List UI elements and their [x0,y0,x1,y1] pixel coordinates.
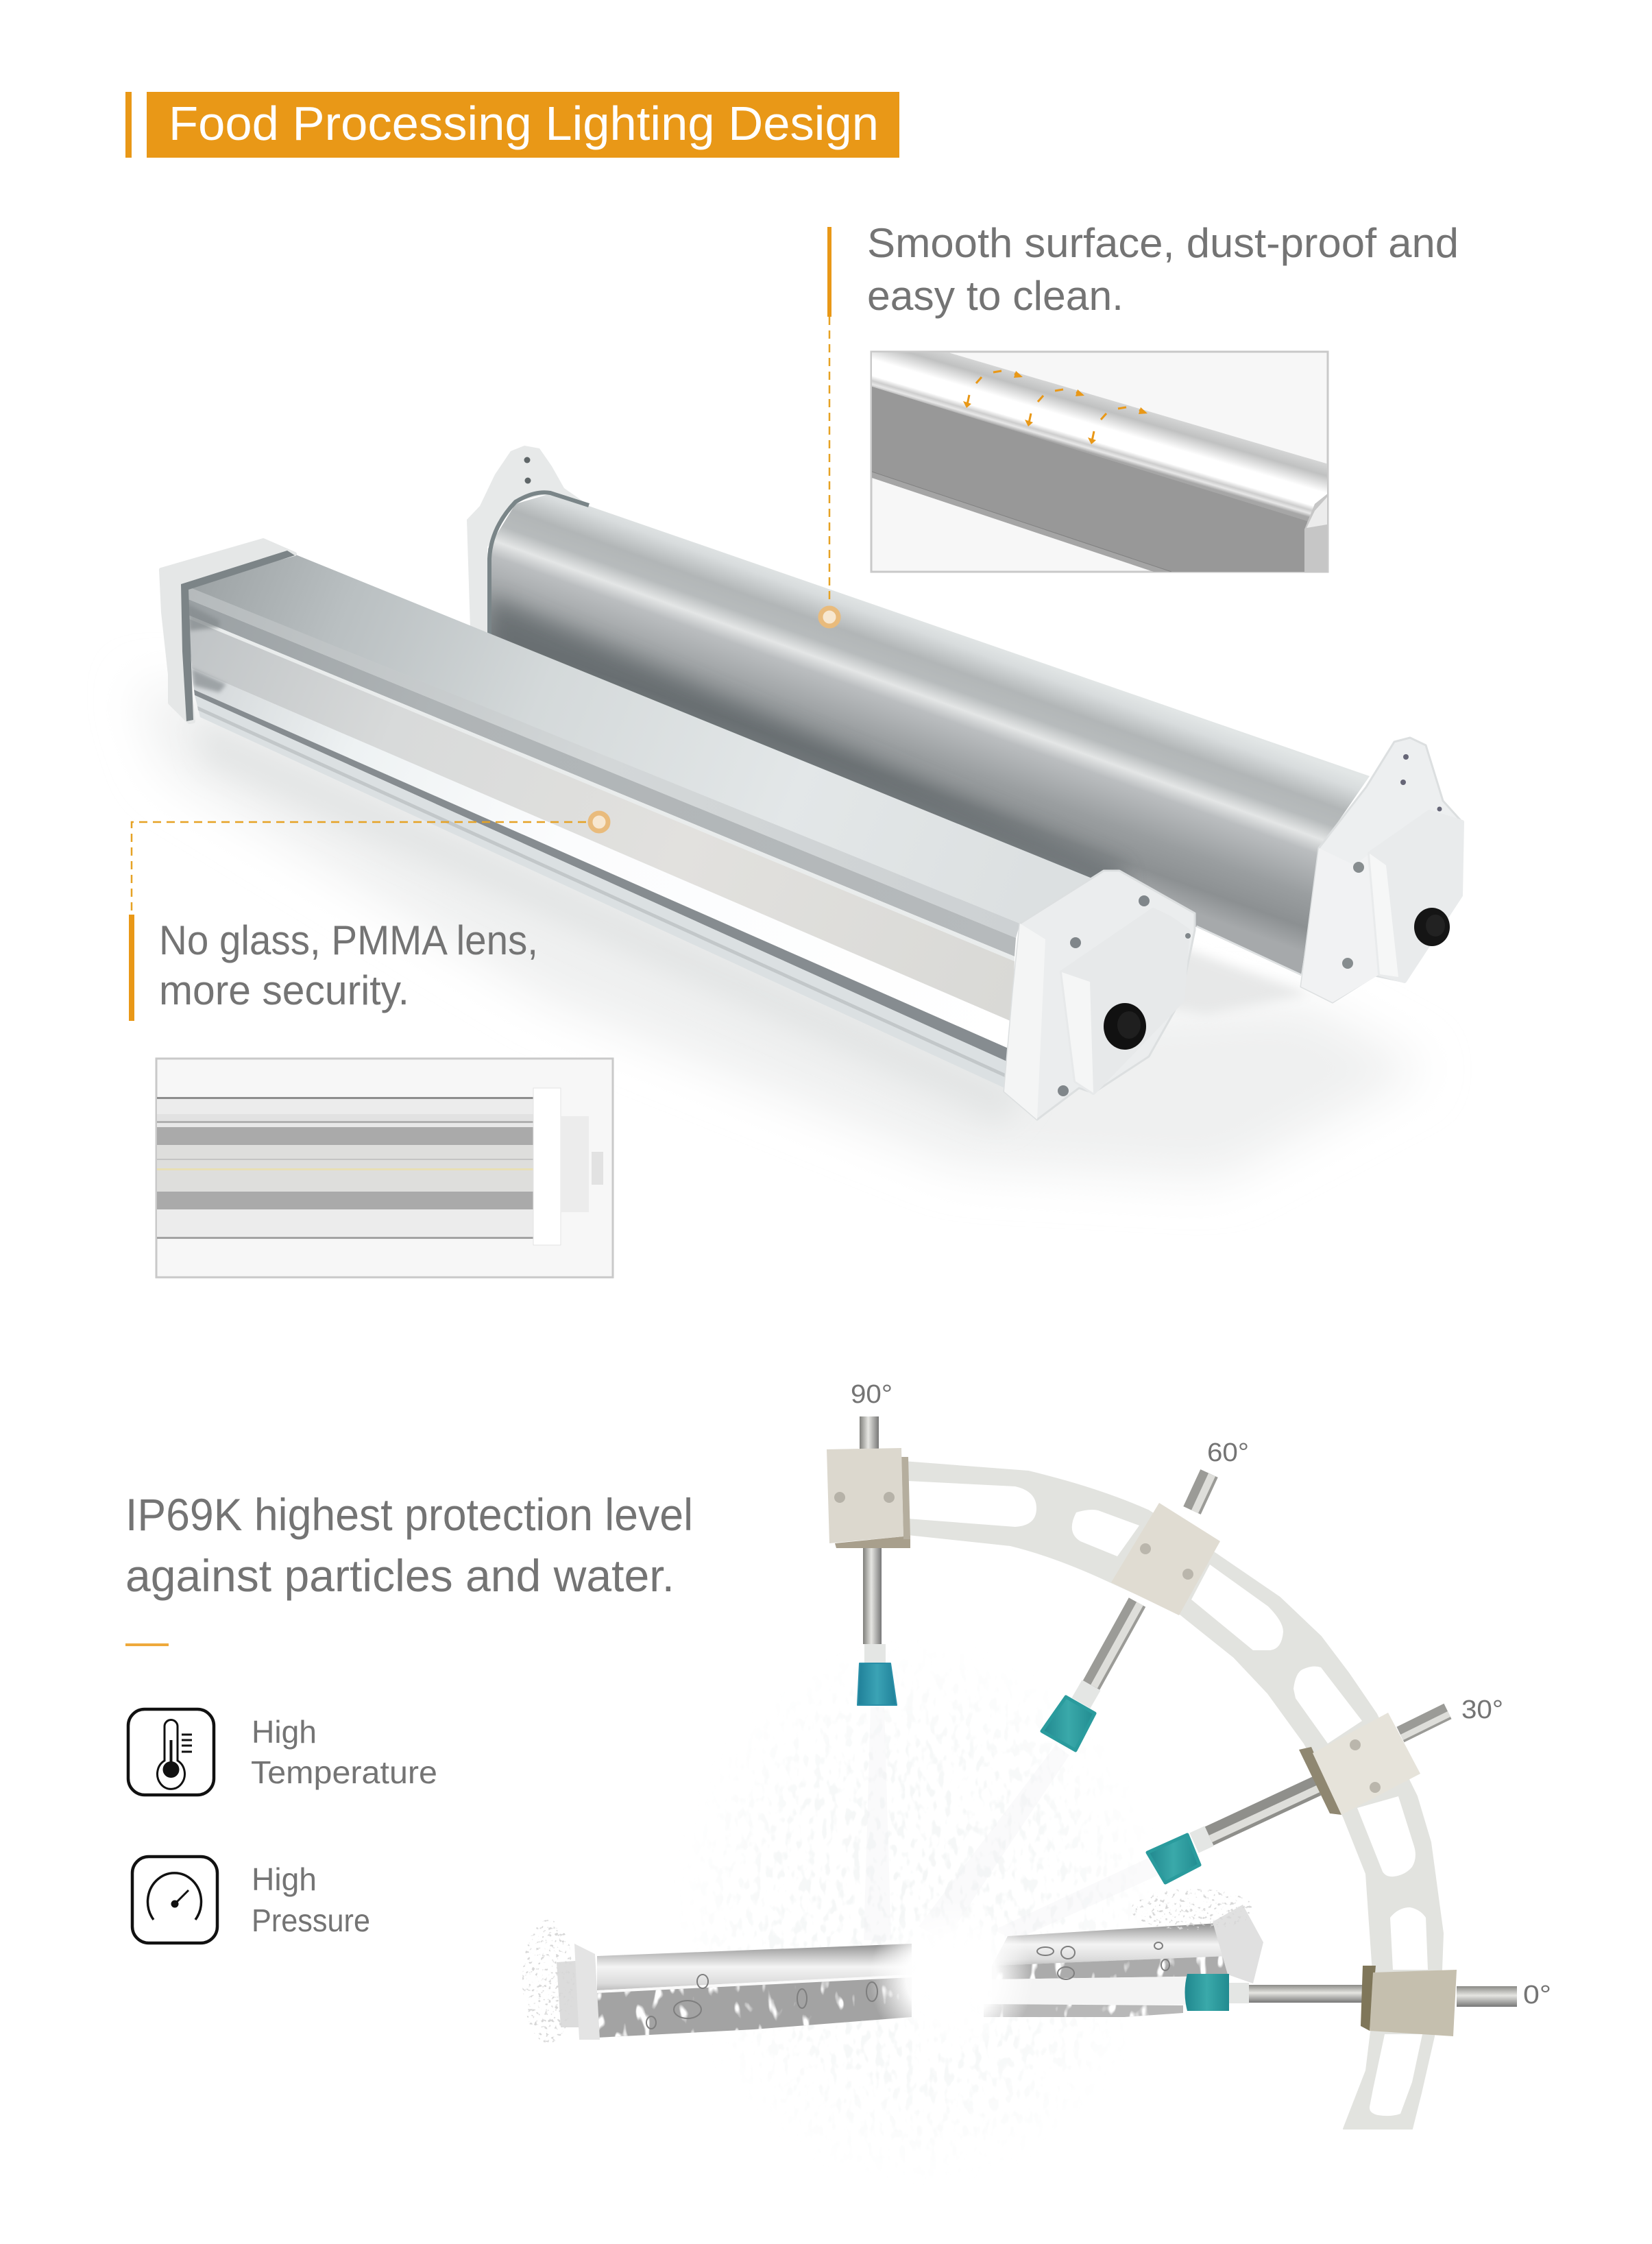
label: high pressure: High [252,1861,317,1897]
back lamp right end cap [1301,738,1462,1002]
rod and nozzle: 90 degrees [827,1416,910,1705]
wet lamp left section [557,1944,912,2040]
rod and nozzle: 0 degrees [1185,1966,1517,2036]
angle labels: 90° [851,1380,892,1409]
front knob [1104,1003,1146,1050]
callout: smooth surface: easy to clean. [867,273,1123,319]
angle labels: 60° [1207,1438,1249,1467]
floor shadow [137,686,1426,1179]
front lamp side bands [185,586,1020,1089]
front lamp top face [184,553,1107,924]
back lamp [467,446,1462,1002]
label: high temperature: Temperature [251,1754,437,1790]
angle labels: 30° [1461,1696,1503,1724]
test rig [827,1380,1551,2129]
angle labels [851,1380,1551,2010]
splash: right [1131,1889,1254,1930]
heading: IP69K [125,1489,693,1601]
icon: pressure gauge [132,1857,217,1943]
callout: smooth surface [821,220,1459,626]
water spray [672,1639,1165,2187]
wet lamp right section [984,1905,1263,2017]
angle labels: 0° [1523,1981,1551,2010]
back lamp body [488,494,1370,976]
droplets [646,1942,1169,2029]
label: high temperature [251,1714,437,1790]
heading: IP69K: against particles and water. [125,1550,675,1601]
inset: smooth surface closeup [871,352,1328,572]
callout: smooth surface: Smooth surface, dust-proof and [867,220,1459,266]
callout: PMMA lens: more security. [159,967,409,1013]
front lamp [161,540,1195,1120]
rod and nozzle: 60 degrees [1042,1473,1220,1750]
splash: left [522,1920,574,2043]
inset: lens closeup [156,1059,613,1277]
title: Food Processing Lighting Design [169,97,879,150]
rig arc plate [903,1462,1443,2129]
arrows: water run-off [963,371,1147,444]
icon: thermometer [128,1709,214,1795]
front lamp left end cap [161,540,295,722]
wet lamp right end cap [1213,1905,1263,1983]
accent dash [125,1643,169,1646]
wet lamp left end plates [557,1961,579,2027]
front lamp right end cap [1004,871,1195,1120]
back knob [1414,908,1450,946]
label: high temperature: High [252,1714,317,1750]
callout: PMMA lens: No glass, PMMA lens, [159,917,538,963]
label: high pressure: Pressure [252,1903,370,1938]
heading: IP69K: IP69K highest protection level [125,1489,693,1540]
label: high pressure [252,1861,370,1938]
callout: PMMA lens [129,813,608,1021]
rod and nozzle: 30 degrees [1147,1711,1449,1883]
back lamp left bracket [467,446,589,634]
wet lamp [522,1889,1263,2057]
water wash over lamp centre [869,1899,1034,2057]
